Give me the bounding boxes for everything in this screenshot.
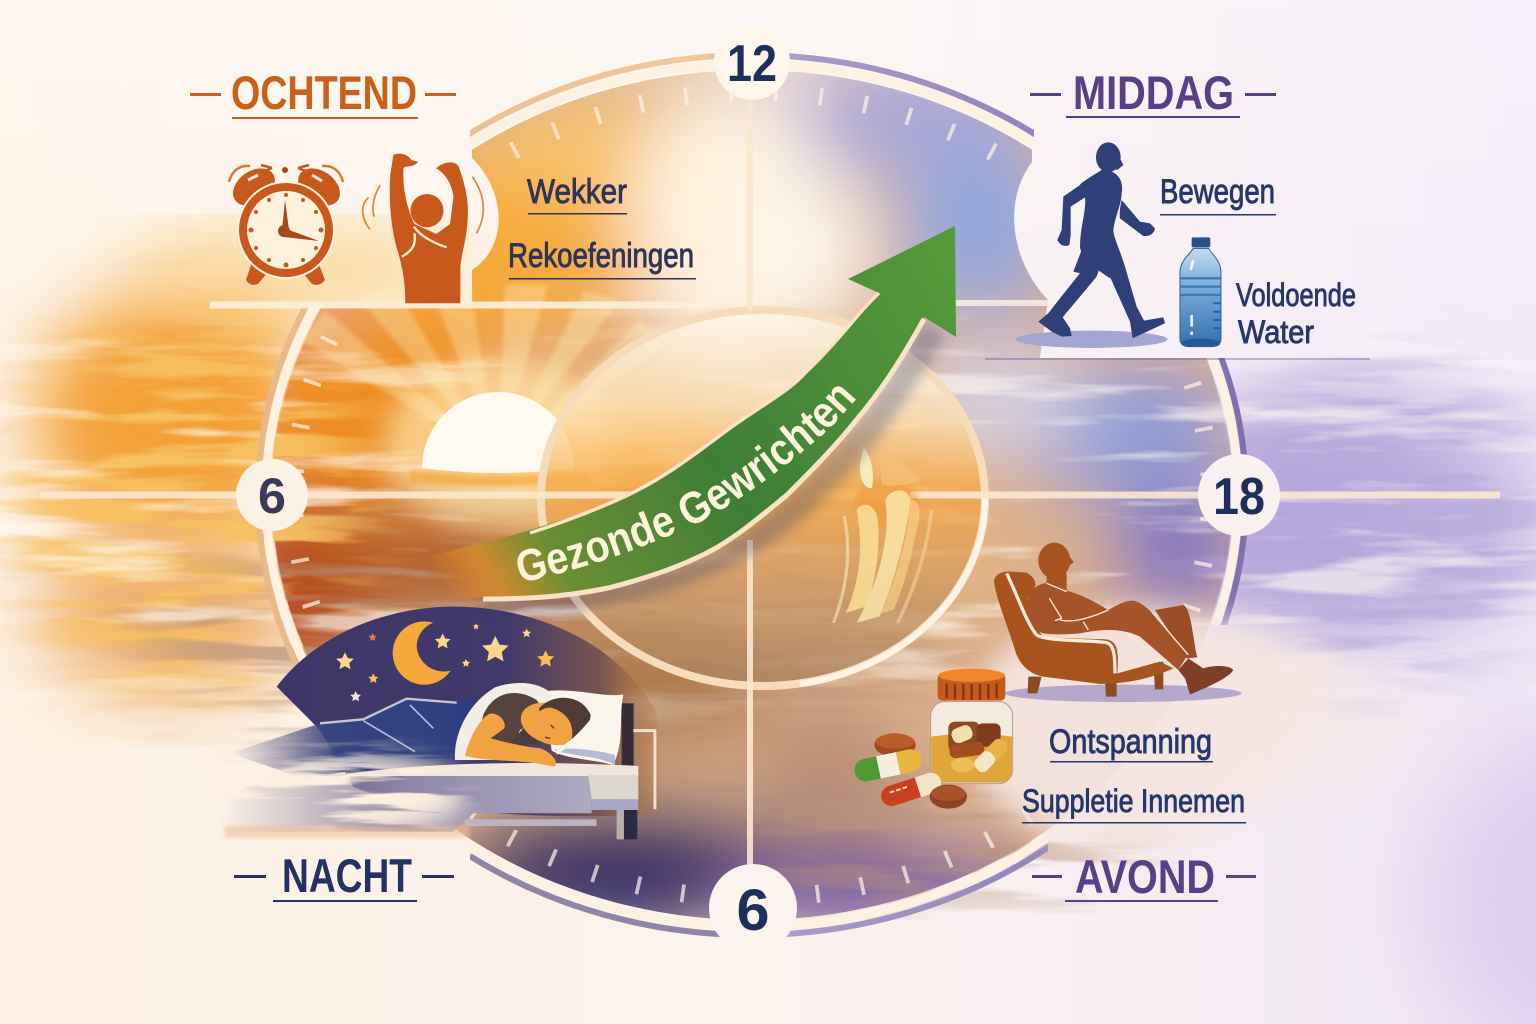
icon: alarm clock [226, 161, 347, 285]
label: Wekker: Wekker [527, 173, 627, 211]
clock number 6 left [236, 459, 308, 531]
icon: person relaxing in chair [994, 543, 1242, 702]
knee joint illustration [833, 446, 932, 623]
bed headboard [617, 703, 655, 839]
sky band behind the clock [35, 235, 1536, 780]
orange, brown and purple cloud streaks [0, 288, 1536, 920]
icon: supplement jar and pills [852, 669, 1013, 809]
clock number 12 [714, 24, 790, 100]
icon: moon [393, 621, 451, 685]
night sky with moon and stars [277, 607, 660, 816]
panel fade: evening area [960, 608, 1345, 851]
mattress [220, 763, 638, 832]
clock outer ring [258, 55, 1246, 935]
clock number 18: 18 [1213, 468, 1265, 526]
clock number 18 [1198, 454, 1280, 536]
heading: MIDDAG: MIDDAG [1073, 66, 1234, 119]
sleeping person in bed [220, 683, 655, 839]
clock tick marks [294, 92, 1210, 898]
horizontal shelf lines [210, 303, 1370, 359]
bed fading into clouds [223, 738, 478, 840]
blanket [230, 697, 477, 778]
loose pills [852, 733, 967, 809]
label: Rekoefeningen: Rekoefeningen [508, 237, 694, 275]
label: Bewegen: Bewegen [1160, 173, 1275, 211]
white cloud streaks [0, 300, 1536, 722]
clock number 6 bottom: 6 [736, 878, 770, 943]
clock number 6 bottom [709, 864, 797, 952]
label: Voldoende Water: Water [1238, 314, 1314, 350]
arrow label: Gezonde Gewrichten [517, 386, 856, 580]
clock cross lines [40, 100, 1500, 880]
jar body [931, 698, 1013, 784]
arrow: Gezonde Gewrichten [434, 226, 956, 618]
clock number 6 left: 6 [258, 468, 286, 524]
label: Suppletie Innemen: Suppletie Innemen [1022, 783, 1245, 819]
icon: stars [336, 623, 554, 701]
clock number 12: 12 [727, 35, 777, 93]
head [515, 695, 586, 752]
torso [477, 693, 540, 747]
sheet [455, 683, 553, 760]
sun with rays [300, 285, 665, 530]
label: Ontspanning: Ontspanning [1049, 723, 1212, 761]
arm [465, 713, 556, 767]
icon: stretching person [363, 154, 483, 303]
heading: NACHT: NACHT [282, 849, 412, 902]
label: Voldoende Water: Voldoende [1236, 277, 1356, 313]
heading: AVOND: AVOND [1075, 850, 1215, 903]
jar cap [938, 669, 1005, 701]
icon: walking person [1016, 142, 1168, 348]
icon: water bottle [1180, 237, 1221, 347]
pillow [543, 690, 623, 765]
label: Voldoende Water [1236, 277, 1356, 350]
clock face with four day quadrants [274, 71, 1230, 918]
heading: OCHTEND: OCHTEND [231, 66, 417, 119]
inner dial circle [541, 310, 985, 686]
